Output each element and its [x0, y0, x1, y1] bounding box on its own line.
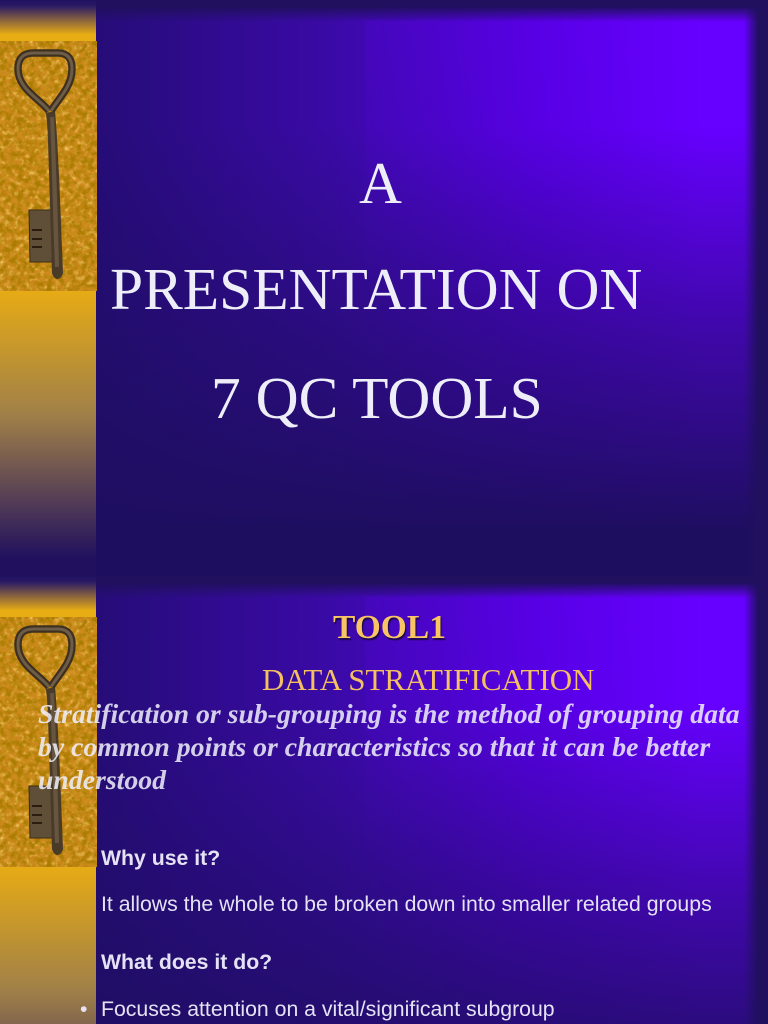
left gold strip: [0, 576, 96, 1024]
top dark band: [96, 0, 768, 22]
left gold strip: [0, 0, 96, 576]
icon: rusty key on sand: [0, 617, 97, 867]
panel: tool 1 slide: [0, 580, 758, 1024]
bullet: focuses attention: •: [80, 997, 87, 1021]
definition text: Stratification or sub-grouping is the method of grouping data: [38, 699, 740, 730]
title line: PRESENTATION ON: PRESENTATION ON: [110, 256, 642, 322]
subheading: data stratification: DATA STRATIFICATION: [262, 662, 595, 697]
title line: A: A: [359, 150, 402, 216]
background vertical fade: [96, 576, 768, 1024]
right dark band: [744, 0, 768, 576]
heading: TOOL1: TOOL1: [333, 609, 446, 646]
right dark band: [744, 576, 768, 1024]
bright inner panel: [365, 20, 745, 305]
title line: 7 QC TOOLS: 7 QC TOOLS: [211, 365, 543, 431]
panel: title slide: [0, 4, 758, 552]
icon: rusty key on sand: [0, 41, 97, 291]
label: why use it: Why use it?: [101, 846, 220, 870]
background vertical fade: [96, 0, 768, 576]
bullet: focuses attention: Focuses attention on a vital/significant subgroup: [101, 997, 555, 1021]
text: why use it answer: It allows the whole to be broken down into smaller related groups: [101, 892, 712, 916]
slide background gradient: [96, 576, 768, 1024]
slide background gradient: [96, 0, 768, 576]
label: what does it do: What does it do?: [101, 950, 272, 974]
definition text: understood: [38, 765, 166, 796]
definition text: [38, 699, 740, 796]
bright inner panel: [365, 596, 745, 881]
top dark band: [96, 576, 768, 598]
definition text: by common points or characteristics so that it can be better: [38, 732, 710, 763]
